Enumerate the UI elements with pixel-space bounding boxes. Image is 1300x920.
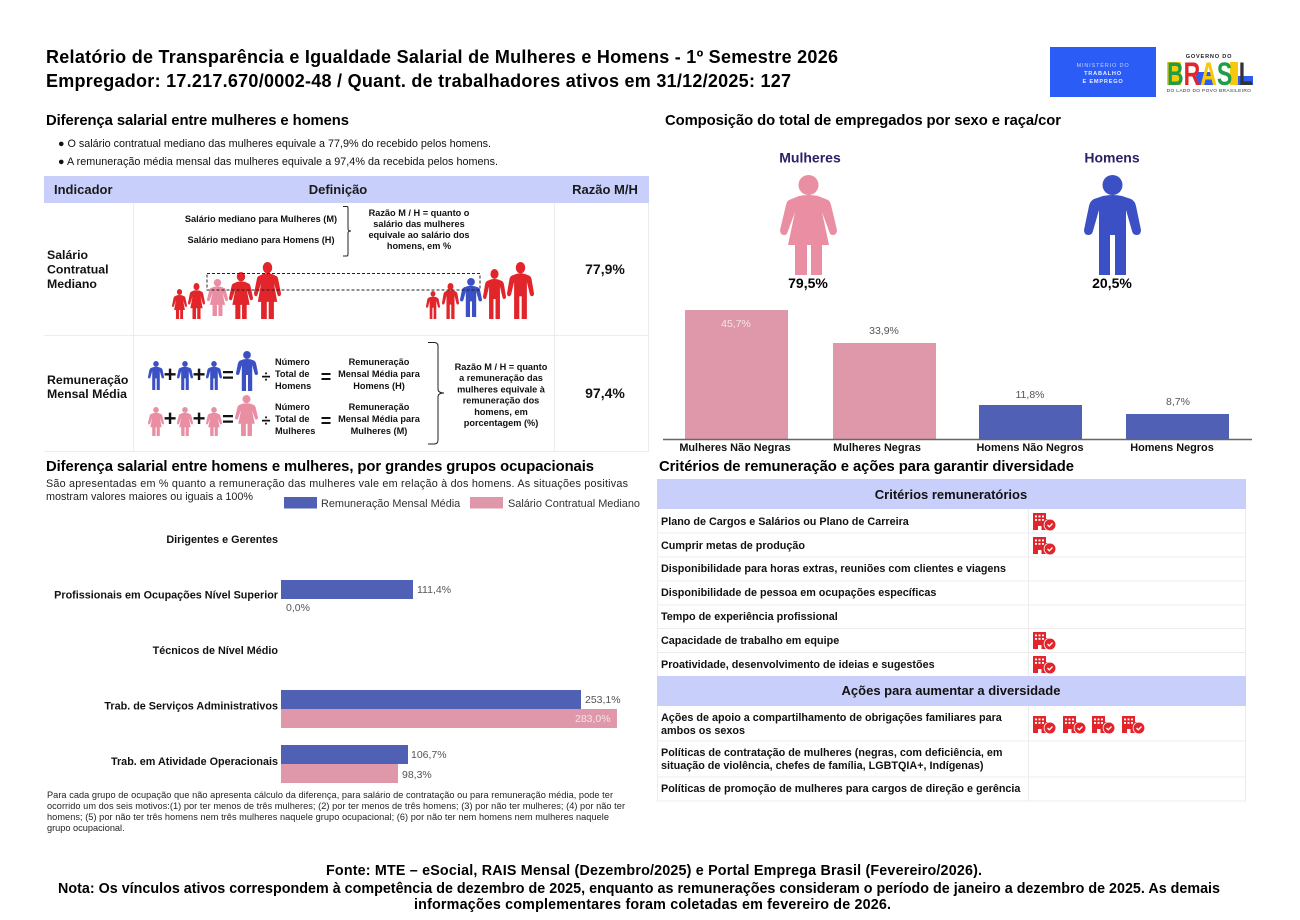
values: 106,7% <box>411 749 447 761</box>
formula: mulheres: = <box>222 409 234 431</box>
footnote: Para cada grupo de ocupação que não apresenta cálculo da diferença, para salário de contratação ou para remuneração média, pode ter <box>47 790 613 800</box>
formula: homens: + <box>193 362 205 387</box>
category labels: Profissionais em Ocupações Nível Superior <box>54 590 279 602</box>
panel: mulheres <box>779 150 841 291</box>
icons: critérios adotados <box>1033 513 1056 674</box>
icons: men in ascending height <box>426 262 534 319</box>
rows: ações: Políticas de promoção de mulheres para cargos de direção e gerência <box>661 783 1021 795</box>
heading: grupos ocupacionais: Diferença salarial entre homens e mulheres, por grandes grupos ocupacionais <box>46 459 594 475</box>
legend: Salário Contratual Mediano <box>508 498 640 510</box>
definition text: razão M/H remuneração: a remuneração das <box>459 373 543 383</box>
brace <box>343 206 351 256</box>
text: bullets: ● A remuneração média mensal das mulheres equivale a 97,4% da recebida pelos homens. <box>58 156 498 168</box>
definition text: razão M/H remuneração: Razão M / H = quanto <box>455 362 548 372</box>
category labels: Trab. em Atividade Operacionais <box>111 756 278 768</box>
footer: fonte e nota <box>58 863 1220 913</box>
rows: critérios: Cumprir metas de produção <box>661 540 805 552</box>
row label: Salário Contratual Mediano: Salário <box>47 248 88 262</box>
definition text: razão M/H <box>368 208 470 251</box>
formula: homens: Homens (H) <box>353 381 405 391</box>
formula: mulheres: ÷ <box>262 413 271 430</box>
formula: homens: + <box>164 362 176 387</box>
header: ações: Ações para aumentar a diversidade <box>842 683 1060 698</box>
logo: Ministério do Trabalho e Emprego: TRABALHO <box>1084 71 1122 77</box>
values: 98,3% <box>402 769 432 781</box>
footnote: ocorrido um dos seis motivos:(1) por ter menos de três mulheres; (2) por ter menos de três homens; (3) por não ter mulheres; (4) por não ter <box>47 801 625 811</box>
values: 253,1% <box>585 694 621 706</box>
definition text: razão M/H: homens, em % <box>387 241 451 251</box>
logo: Governo do Brasil: DO LADO DO POVO BRASILEIRO <box>1167 88 1251 94</box>
rows: critérios <box>661 516 1006 671</box>
formula: mulheres: Mensal Média para <box>338 414 421 424</box>
row label: Remuneração Mensal Média: Mensal Média <box>47 387 127 401</box>
rows: critérios: Disponibilidade para horas extras, reuniões com clientes e viagens <box>661 563 1006 575</box>
category labels: Trab. de Serviços Administrativos <box>104 700 278 712</box>
footer: fonte e nota: Nota: Os vínculos ativos correspondem à competência de dezembro de 2025, enquanto as remunerações consideram o período de janeiro a dezembro de 2025. As demais <box>58 881 1220 897</box>
row label: Salário Contratual Mediano: Mediano <box>47 277 97 291</box>
logo: Ministério do Trabalho e Emprego <box>1050 47 1156 97</box>
rows: critérios: Plano de Cargos e Salários ou Plano de Carreira <box>661 516 910 528</box>
text: descrição do gráfico <box>46 478 629 503</box>
bar chart: composição por sexo e raça/cor <box>663 310 1252 454</box>
rows: ações: Políticas de contratação de mulheres (negras, com deficiência, em <box>661 747 1002 759</box>
formula: mulheres: Mulheres (M) <box>351 426 407 436</box>
row label: Salário Contratual Mediano: Contratual <box>47 262 108 276</box>
formula: mulheres: = <box>321 411 331 431</box>
formula: homens: Número <box>275 357 310 367</box>
rows: ações: Ações de apoio a compartilhamento de obrigações familiares para <box>661 712 1003 724</box>
formula: mulheres <box>148 395 421 436</box>
formula: homens <box>148 351 421 391</box>
heading: critérios: Critérios de remuneração e ações para garantir diversidade <box>659 459 1074 475</box>
title: Empregador: 17.217.670/0002-48 / Quant. de trabalhadores ativos em 31/12/2025: 127 <box>46 71 791 91</box>
formula: mulheres: Remuneração <box>349 402 410 412</box>
value: 77,9%: 77,9% <box>585 261 625 277</box>
panel: homens <box>1084 150 1141 291</box>
text: bullets <box>58 138 498 168</box>
formula: mulheres: + <box>164 406 176 431</box>
definition text: salário mediano <box>185 214 337 245</box>
footnote: homens; (5) por não ter três homens nem três mulheres naquele grupo ocupacional; (6) por não ter nem homens nem mulheres naquele <box>47 812 609 822</box>
table header: Indicador <box>54 182 113 197</box>
rows: ações <box>661 712 1021 795</box>
formula: mulheres: Total de <box>275 414 310 424</box>
bar chart: composição por sexo e raça/cor: Homens Não Negros <box>976 442 1084 454</box>
formula: mulheres: + <box>193 406 205 431</box>
rows: ações: situação de violência, chefes de família, LGBTQIA+, Indígenas) <box>661 760 984 772</box>
value: 97,4%: 97,4% <box>585 385 625 401</box>
header: ações <box>657 676 1246 706</box>
rows: critérios: Tempo de experiência profissional <box>661 611 838 623</box>
header: critérios remuneratórios: Critérios remuneratórios <box>875 487 1027 502</box>
logo: Ministério do Trabalho e Emprego: MINISTÉRIO DO <box>1077 62 1129 69</box>
definition text: razão M/H remuneração: homens, em <box>474 407 528 417</box>
bar chart: grupos ocupacionais <box>54 534 621 783</box>
title: Relatório de Transparência e Igualdade Salarial de Mulheres e Homens - 1º Semestre 2026 <box>46 47 838 67</box>
footnote: grupo ocupacional. <box>47 823 125 833</box>
dashed median box <box>207 274 480 290</box>
definition text: razão M/H remuneração: remuneração dos <box>463 396 539 406</box>
logo: Governo do Brasil: BRASIL <box>1167 56 1253 92</box>
bar chart: composição por sexo e raça/cor: 33,9% <box>869 325 899 337</box>
icons: ações adotadas <box>1033 716 1145 734</box>
text: descrição do gráfico: São apresentadas em % quanto a remuneração das mulheres vale em relação à dos homens. As situações positivas <box>46 478 629 490</box>
table header: Razão M/H <box>572 182 638 197</box>
panel: homens: 20,5% <box>1092 275 1132 291</box>
definition text: razão M/H: equivale ao salário dos <box>368 230 470 240</box>
formula: homens: Remuneração <box>349 357 410 367</box>
definition text: razão M/H remuneração: porcentagem (%) <box>464 418 538 428</box>
category labels: Dirigentes e Gerentes <box>166 534 278 546</box>
definition text: razão M/H: Razão M / H = quanto o <box>369 208 470 218</box>
footnote <box>47 790 625 833</box>
rows: ações: ambos os sexos <box>661 725 745 737</box>
table header: Definição <box>309 182 367 197</box>
bar chart: composição por sexo e raça/cor: Mulheres Não Negras <box>679 442 791 454</box>
definition text: razão M/H remuneração <box>455 362 548 428</box>
definition text: salário mediano: Salário mediano para Mulheres (M) <box>185 214 337 224</box>
table header <box>44 176 649 203</box>
bar chart: composição por sexo e raça/cor: Mulheres Negras <box>833 442 921 454</box>
category labels: Técnicos de Nível Médio <box>153 645 278 657</box>
category labels <box>54 534 279 768</box>
definition text: razão M/H remuneração: mulheres equivale à <box>457 384 546 394</box>
heading: composição: Composição do total de empregados por sexo e raça/cor <box>665 113 1061 129</box>
definition text: salário mediano: Salário mediano para Homens (H) <box>187 235 335 245</box>
values: 0,0% <box>286 602 310 614</box>
bar chart: composição por sexo e raça/cor: 8,7% <box>1166 396 1190 408</box>
logo: Governo do Brasil: GOVERNO DO <box>1186 54 1232 60</box>
row label: Salário Contratual Mediano <box>47 248 108 291</box>
formula: mulheres: Número <box>275 402 310 412</box>
rows: critérios: Capacidade de trabalho em equipe <box>661 635 839 647</box>
rows: critérios: Proatividade, desenvolvimento de ideias e sugestões <box>661 659 935 671</box>
legend <box>284 497 640 510</box>
rows: critérios: Disponibilidade de pessoa em ocupações específicas <box>661 587 936 599</box>
logo: Ministério do Trabalho e Emprego: E EMPREGO <box>1082 79 1124 85</box>
values: 283,0% <box>575 713 611 725</box>
formula: mulheres: Mulheres <box>275 426 315 436</box>
formula: homens: Total de <box>275 369 310 379</box>
values: 111,4% <box>417 584 451 596</box>
text: bullets: ● O salário contratual mediano das mulheres equivale a 77,9% do recebido pelos homens. <box>58 138 491 150</box>
formula: homens: ÷ <box>262 369 271 386</box>
panel: mulheres: Mulheres <box>779 150 841 166</box>
bar chart: composição por sexo e raça/cor: Homens Negros <box>1130 442 1214 454</box>
formula: homens: Mensal Média para <box>338 369 421 379</box>
panel: tabela de indicadores <box>44 176 649 452</box>
icons: women in ascending height <box>172 262 281 319</box>
brace <box>428 342 444 444</box>
values <box>286 584 621 781</box>
formula: homens: = <box>222 365 234 387</box>
heading: diferença salarial: Diferença salarial entre mulheres e homens <box>46 113 349 129</box>
row label: Remuneração Mensal Média: Remuneração <box>47 373 129 387</box>
bar chart: composição por sexo e raça/cor: 45,7% <box>721 318 751 330</box>
footer: fonte e nota: informações complementares foram coletadas em fevereiro de 2026. <box>414 897 891 913</box>
formula: homens: Homens <box>275 381 311 391</box>
panel: homens: Homens <box>1084 150 1140 166</box>
panel: critérios e ações <box>657 479 1246 801</box>
definition text: razão M/H: salário das mulheres <box>373 219 465 229</box>
row label: Remuneração Mensal Média <box>47 373 129 401</box>
bars <box>281 580 617 783</box>
footer: fonte e nota: Fonte: MTE – eSocial, RAIS Mensal (Dezembro/2025) e Portal Emprega Brasil (Fevereiro/2026). <box>326 863 982 879</box>
panel: mulheres: 79,5% <box>788 275 828 291</box>
header: critérios remuneratórios <box>657 479 1246 509</box>
title <box>46 47 838 91</box>
bar chart: composição por sexo e raça/cor: 11,8% <box>1016 389 1044 401</box>
text: descrição do gráfico: mostram valores maiores ou iguais a 100% <box>46 491 253 503</box>
legend: Remuneração Mensal Média <box>321 498 461 510</box>
formula: homens: = <box>321 367 331 387</box>
